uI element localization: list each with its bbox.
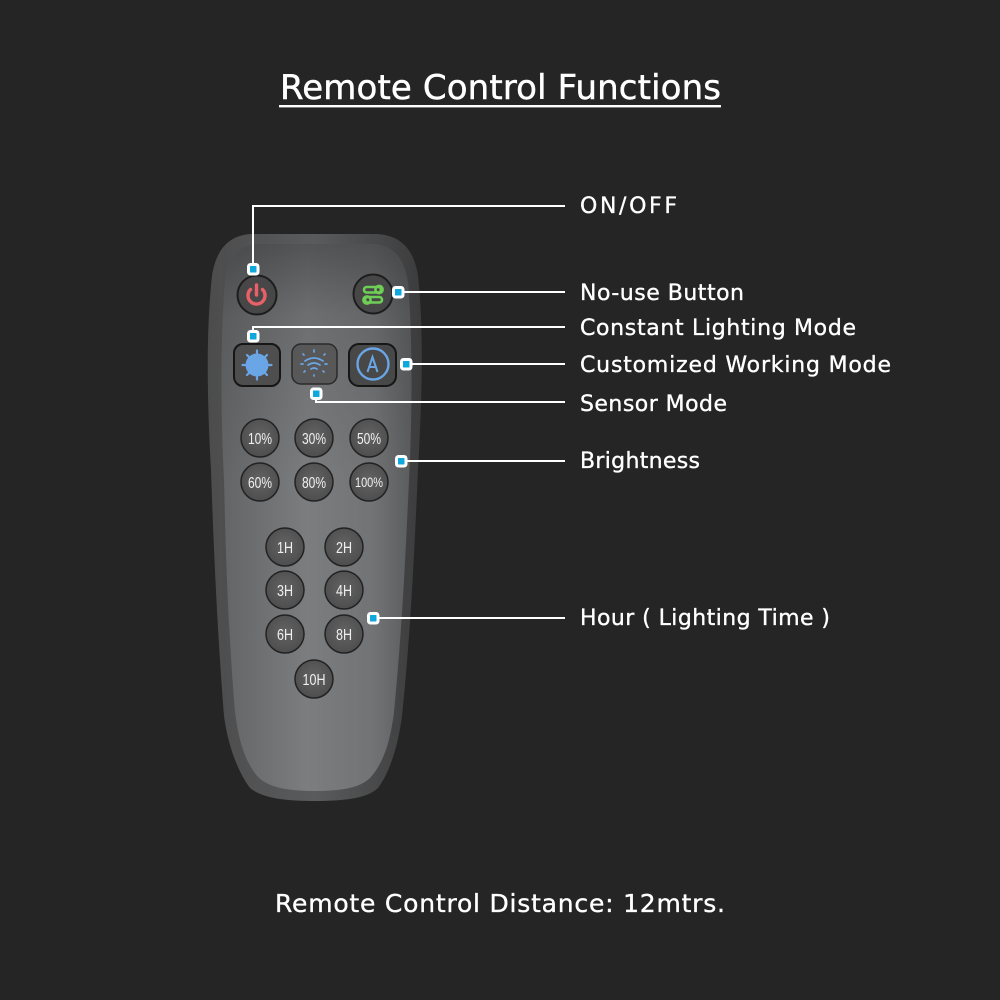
hour buttons: 4H — [336, 583, 352, 600]
callout: Sensor Mode — [312, 389, 727, 417]
hour buttons — [266, 528, 363, 698]
hour buttons: 3H — [277, 583, 293, 600]
brightness buttons: 30% — [302, 431, 326, 448]
callout: Customized Working Mode: Customized Working Mode — [580, 353, 891, 378]
brightness buttons: 50% — [357, 431, 381, 448]
callout: Constant Lighting Mode — [248, 316, 856, 341]
footer: remote control distance: Remote Control Distance: 12mtrs. — [275, 889, 725, 918]
callout: Constant Lighting Mode: Constant Lighting Mode — [580, 316, 856, 341]
brightness buttons: 60% — [248, 475, 272, 492]
callout: No-use Button: No-use Button — [580, 281, 744, 306]
sensor mode button — [292, 344, 337, 384]
brightness buttons — [241, 419, 388, 501]
remote control body — [208, 234, 422, 801]
title: Remote Control Functions — [280, 68, 721, 108]
callout: Hour (Lighting Time) — [368, 606, 830, 631]
callout: Brightness: Brightness — [580, 449, 700, 474]
hour buttons: 10H — [302, 672, 326, 689]
hour buttons: 1H — [277, 540, 293, 557]
hour buttons: 8H — [336, 627, 352, 644]
callout: Brightness — [396, 449, 700, 474]
hour buttons: 2H — [336, 540, 352, 557]
power button — [238, 276, 276, 314]
callout: Hour (Lighting Time): Hour ( Lighting Time ) — [580, 606, 830, 631]
callout: Sensor Mode: Sensor Mode — [580, 392, 727, 417]
callout: ON/OFF: ON/OFF — [580, 194, 677, 219]
brightness buttons: 10% — [248, 431, 272, 448]
hour buttons: 6H — [277, 627, 293, 644]
no-use settings button — [354, 274, 392, 314]
customized working mode button — [349, 344, 396, 386]
callout: No-use Button — [394, 281, 744, 306]
callout: Customized Working Mode — [402, 353, 891, 378]
constant lighting button — [234, 344, 280, 386]
brightness buttons: 80% — [302, 475, 326, 492]
callout: ON/OFF — [248, 194, 677, 274]
brightness buttons: 100% — [355, 474, 383, 490]
